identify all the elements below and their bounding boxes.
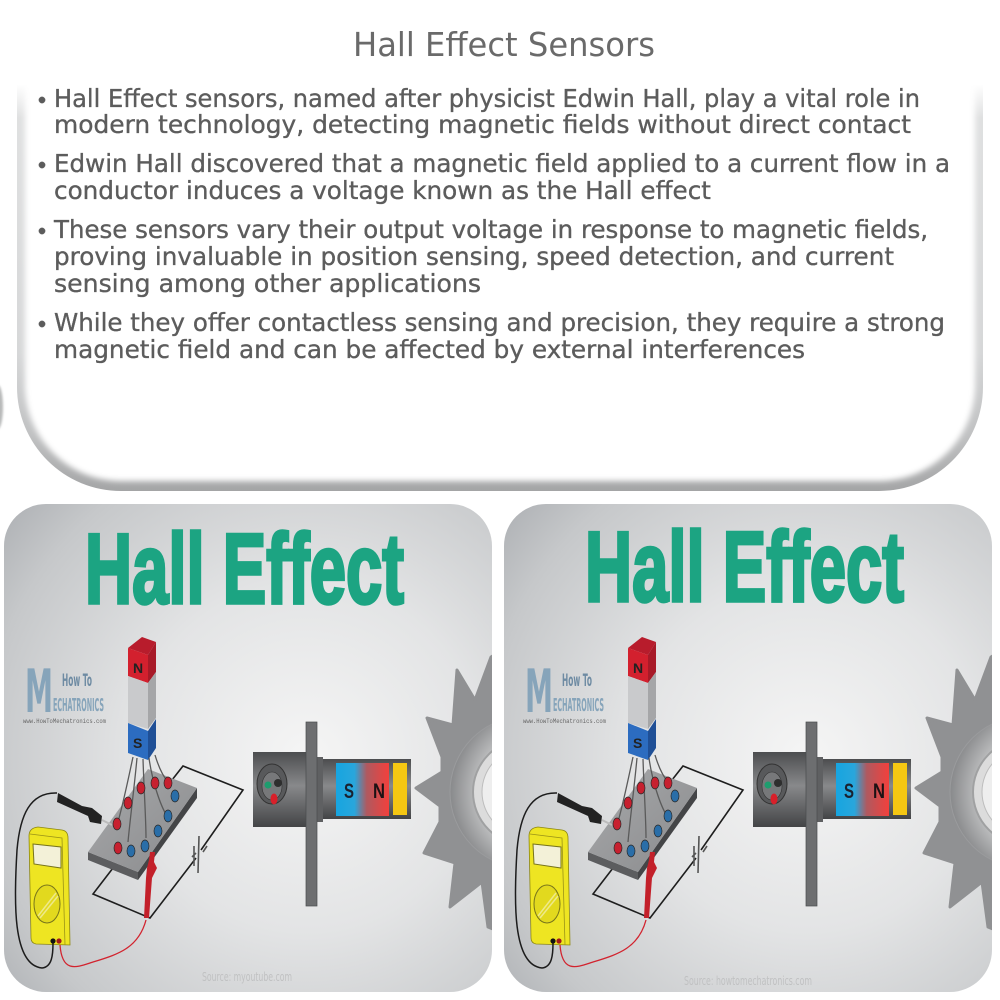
magnet S N bbox=[336, 763, 389, 816]
magnet bbox=[128, 637, 156, 760]
logo: How To Mechatronics: M bbox=[25, 657, 53, 727]
panel: left image: ECHATRONICS bbox=[53, 695, 104, 716]
text block: bullet list bbox=[39, 84, 950, 364]
magnet bbox=[628, 637, 656, 760]
battery bbox=[192, 836, 207, 873]
black probe bbox=[515, 793, 612, 968]
charges bbox=[113, 777, 179, 857]
gear bbox=[414, 654, 492, 930]
title: Hall Effect Sensors bbox=[353, 25, 655, 64]
bullet 3 bbox=[39, 215, 928, 298]
connector face bbox=[257, 764, 287, 804]
logo: How To Mechatronics: How To bbox=[562, 671, 592, 691]
red probe bbox=[60, 852, 157, 967]
source credit: Source: myoutube.com bbox=[202, 970, 292, 984]
panel: right image bbox=[504, 504, 1000, 992]
bullet 1: Hall Effect sensors, named after physicist Edwin Hall, play a vital role in bbox=[54, 84, 920, 113]
bullet 4: magnetic field and can be affected by external interferences bbox=[54, 335, 805, 364]
bullet 2 bbox=[39, 149, 950, 205]
heading: Hall Effect: Hall Effect bbox=[85, 513, 404, 624]
panel: text card bbox=[0, 0, 1000, 491]
sensor bbox=[253, 722, 411, 906]
logo: How To Mechatronics: M bbox=[525, 657, 553, 727]
multimeter bbox=[529, 827, 570, 945]
bullet 4: While they offer contactless sensing and precision, they require a strong bbox=[54, 308, 945, 337]
bullet 4 bbox=[39, 308, 945, 364]
plate bbox=[88, 769, 197, 880]
sensor bbox=[753, 722, 911, 906]
logo: How To Mechatronics: www.HowToMechatronics.com bbox=[23, 718, 106, 725]
magnet S N: S bbox=[844, 780, 854, 803]
black probe bbox=[15, 793, 112, 968]
logo: How To Mechatronics: How To bbox=[62, 671, 92, 691]
magnet: S bbox=[633, 735, 642, 751]
charges bbox=[613, 777, 679, 857]
magnet S N: S bbox=[344, 780, 354, 803]
connector face bbox=[757, 764, 787, 804]
source credit: Source: howtomechatronics.com bbox=[684, 974, 812, 988]
bullet 3: proving invaluable in position sensing, speed detection, and current bbox=[54, 242, 894, 271]
field lines bbox=[618, 755, 668, 842]
gear bbox=[914, 654, 992, 930]
plate bbox=[588, 769, 697, 880]
circuit wire bbox=[593, 766, 743, 918]
logo: How To Mechatronics bbox=[23, 668, 106, 723]
magnet S N bbox=[836, 763, 889, 816]
red probe bbox=[560, 852, 657, 967]
bullet 3: These sensors vary their output voltage in response to magnetic fields, bbox=[53, 215, 928, 244]
bullet 2: conductor induces a voltage known as the Hall effect bbox=[54, 176, 711, 205]
magnet: S bbox=[133, 735, 142, 751]
magnet: N bbox=[633, 660, 643, 676]
bullet 3: sensing among other applications bbox=[54, 269, 481, 298]
circuit wire bbox=[93, 766, 243, 918]
logo: How To Mechatronics: www.HowToMechatronics.com bbox=[523, 718, 606, 725]
logo: How To Mechatronics bbox=[523, 668, 606, 723]
magnet: N bbox=[133, 660, 143, 676]
bullet 1: modern technology, detecting magnetic fields without direct contact bbox=[54, 110, 911, 139]
magnet S N: N bbox=[373, 780, 385, 803]
battery bbox=[692, 836, 707, 873]
bullet 1 bbox=[39, 84, 920, 139]
panel: left image bbox=[4, 504, 492, 992]
multimeter bbox=[29, 827, 70, 945]
bullet 2: Edwin Hall discovered that a magnetic field applied to a current flow in a bbox=[54, 149, 950, 178]
magnet S N: N bbox=[873, 780, 885, 803]
field lines bbox=[118, 755, 168, 842]
panel: right image: ECHATRONICS bbox=[553, 695, 604, 716]
